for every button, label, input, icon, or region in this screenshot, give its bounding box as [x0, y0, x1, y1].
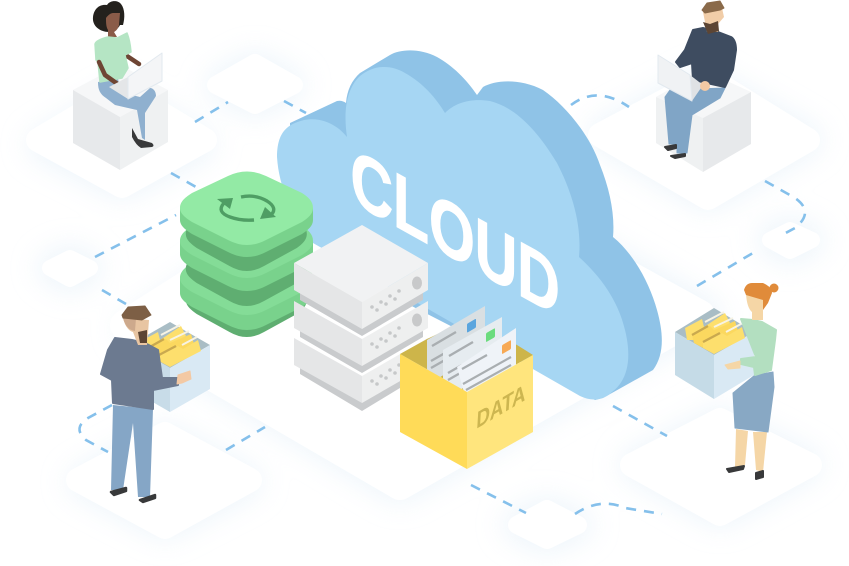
background shadows	[40, 65, 812, 540]
layer 1	[180, 172, 313, 271]
sweater	[676, 28, 736, 87]
platform: small top	[216, 63, 294, 105]
folders	[141, 325, 201, 367]
laptop	[109, 53, 162, 99]
box interior	[400, 320, 533, 392]
shoes	[132, 128, 154, 148]
box	[130, 322, 210, 412]
document: front	[457, 328, 516, 396]
jeans	[98, 78, 156, 140]
file box: left man	[130, 322, 210, 412]
hand	[700, 81, 710, 91]
box left face	[400, 354, 467, 469]
platform: small left	[50, 258, 90, 279]
head	[744, 283, 778, 320]
arm: near	[99, 62, 119, 85]
platform: top right	[600, 78, 808, 198]
icon: sync arrows	[217, 196, 276, 220]
person: man standing with box	[101, 306, 191, 502]
arm: far	[127, 56, 139, 64]
cube seat	[73, 65, 168, 170]
platform: top left	[38, 90, 205, 186]
hair	[93, 1, 124, 32]
box label: DATA	[476, 378, 527, 434]
server unit 3	[294, 338, 428, 411]
head	[702, 1, 724, 34]
data box	[400, 306, 533, 469]
face	[106, 13, 120, 37]
jeans	[111, 405, 153, 497]
sweater	[101, 338, 178, 409]
cloud front	[277, 67, 628, 399]
layer 2	[180, 204, 313, 306]
head	[122, 306, 151, 345]
shirt	[95, 33, 131, 82]
person: man sitting with laptop	[656, 1, 751, 172]
document: middle	[443, 317, 502, 400]
layer 3	[180, 242, 313, 337]
hand	[725, 361, 740, 369]
cloud	[277, 50, 662, 400]
laptop	[658, 55, 703, 101]
platform: small right	[770, 230, 812, 251]
cloud depth	[290, 50, 662, 400]
file box: right woman	[675, 308, 754, 399]
cloud label: CLOUD	[350, 131, 560, 335]
platform: bottom left	[78, 434, 250, 527]
platform: small bottom	[517, 509, 578, 540]
hand	[177, 371, 191, 384]
sweater	[741, 319, 776, 375]
cube seat	[656, 70, 751, 172]
shoes	[665, 145, 685, 158]
person: woman sitting with laptop	[73, 1, 168, 170]
document: back	[427, 306, 485, 385]
platform: bottom right	[632, 420, 810, 514]
jeans	[665, 88, 725, 153]
box	[675, 308, 754, 399]
person: woman standing with box	[725, 283, 778, 479]
green database stack	[180, 172, 313, 337]
legs	[735, 429, 767, 472]
server unit 2	[294, 301, 428, 373]
server stack	[294, 225, 428, 411]
server unit 1	[294, 225, 428, 336]
shoes	[727, 466, 763, 479]
box right face	[467, 355, 533, 469]
dashed connectors	[79, 95, 805, 514]
shoes	[111, 488, 155, 502]
skirt	[733, 372, 774, 432]
platform: central	[125, 150, 700, 485]
folders	[685, 312, 745, 354]
